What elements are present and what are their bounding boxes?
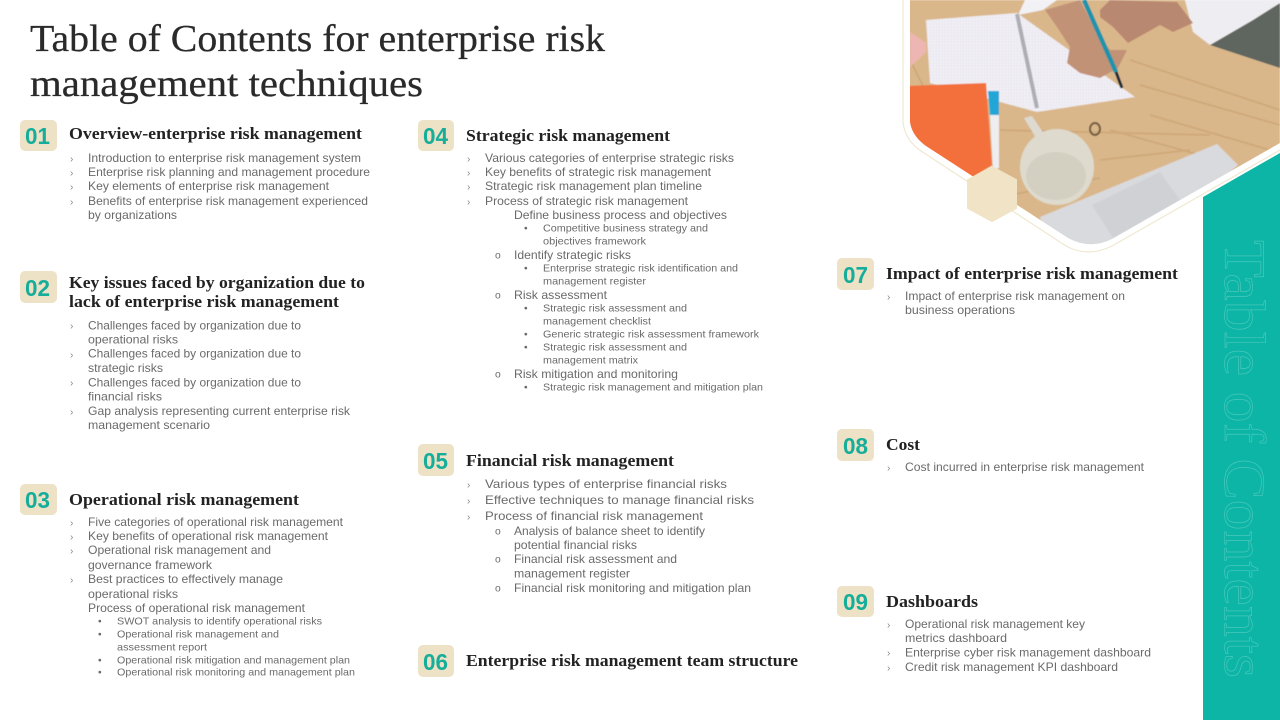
section 04: Identify strategic risks xyxy=(514,248,631,262)
section 05: › xyxy=(467,512,470,523)
section 04: Generic strategic risk assessment framework xyxy=(543,330,760,340)
section 03: Operational risk management xyxy=(69,490,299,509)
section 05: Financial risk assessment and xyxy=(514,552,677,566)
section 07: › xyxy=(887,292,890,303)
section 03: • xyxy=(98,668,102,678)
section 03: › xyxy=(70,532,73,543)
section 05: Financial risk management xyxy=(466,451,674,470)
section 01: 01 xyxy=(25,123,50,149)
section 07: Impact of enterprise risk management on xyxy=(905,289,1125,303)
section 02 xyxy=(20,271,365,432)
section 02: financial risks xyxy=(88,390,162,404)
section 04: Strategic risk management plan timeline xyxy=(485,179,702,193)
section 09: › xyxy=(887,648,890,659)
photo outline xyxy=(903,0,1280,252)
section 09: Credit risk management KPI dashboard xyxy=(905,660,1118,674)
section 01: Enterprise risk planning and management procedure xyxy=(88,165,370,179)
section 04: • xyxy=(524,264,528,274)
section 01: › xyxy=(70,197,73,208)
section 04: management matrix xyxy=(543,356,639,366)
section 02: strategic risks xyxy=(88,361,163,375)
section 01: Introduction to enterprise risk management system xyxy=(88,151,361,165)
section 04: management checklist xyxy=(543,316,651,328)
section 09: Operational risk management key xyxy=(905,617,1085,631)
section 01 xyxy=(20,120,370,222)
photo: desk with notebook, glass and laptop xyxy=(905,0,1280,262)
section 04: › xyxy=(467,168,470,179)
section 02: lack of enterprise risk management xyxy=(69,292,339,311)
section 06: Enterprise risk management team structure xyxy=(466,651,798,670)
section 02: › xyxy=(70,407,73,418)
section 04: management register xyxy=(543,276,647,288)
title: management techniques xyxy=(30,63,423,105)
section 04: Strategic risk management and mitigation plan xyxy=(543,382,763,394)
section 01: › xyxy=(70,168,73,179)
section 05: potential financial risks xyxy=(514,538,637,552)
section 09: Enterprise cyber risk management dashboard xyxy=(905,646,1151,660)
section 01: Benefits of enterprise risk management experienced xyxy=(88,194,368,208)
section 03: • xyxy=(98,656,102,666)
section 05: › xyxy=(467,480,470,491)
section 05: management register xyxy=(514,566,630,580)
section 02: › xyxy=(70,321,73,332)
section 03: › xyxy=(70,575,73,586)
section 04: 04 xyxy=(423,123,448,149)
section 02: operational risks xyxy=(88,332,178,346)
section 04: o xyxy=(495,290,501,302)
section 05: Financial risk monitoring and mitigation plan xyxy=(514,581,751,595)
section 09 xyxy=(837,586,1151,674)
section 03: Five categories of operational risk management xyxy=(88,515,344,529)
section 03: Key benefits of operational risk management xyxy=(88,529,329,543)
section 04: • xyxy=(524,342,528,354)
section 04: • xyxy=(524,382,528,394)
section 04: o xyxy=(495,370,501,380)
section 03: 03 xyxy=(25,487,50,513)
section 08: 08 xyxy=(843,433,868,459)
section 05: o xyxy=(495,554,501,566)
section 09: metrics dashboard xyxy=(905,631,1007,645)
section 04: Key benefits of strategic risk management xyxy=(485,165,712,179)
side band outlined text: Table of Contents xyxy=(1212,240,1277,678)
section 04: Various categories of enterprise strategic risks xyxy=(485,151,734,165)
section 05: › xyxy=(467,496,470,507)
section 02: › xyxy=(70,350,73,361)
section 03: Operational risk monitoring and management plan xyxy=(117,668,355,678)
section 02: Key issues faced by organization due to xyxy=(69,273,365,292)
section 03: › xyxy=(70,546,73,557)
section 03: Best practices to effectively manage xyxy=(88,572,283,586)
title: Table of Contents for enterprise risk xyxy=(30,18,605,60)
section 03 xyxy=(20,484,355,678)
section 08: Cost incurred in enterprise risk management xyxy=(905,460,1145,474)
section 04: • xyxy=(524,304,528,314)
section 03: › xyxy=(70,518,73,529)
section 02: Challenges faced by organization due to xyxy=(88,376,301,390)
section 06: 06 xyxy=(423,649,448,675)
section 07: Impact of enterprise risk management xyxy=(886,264,1178,283)
title xyxy=(30,18,605,105)
section 05: Effective techniques to manage financial risks xyxy=(485,493,754,507)
section 09: Dashboards xyxy=(886,592,978,611)
section 07: 07 xyxy=(843,262,868,288)
icon: cream hexagon xyxy=(968,167,1016,221)
section 03: • xyxy=(98,630,102,640)
section 09: › xyxy=(887,620,890,631)
section 05: o xyxy=(495,526,501,538)
section 05: Various types of enterprise financial risks xyxy=(485,477,727,491)
side band xyxy=(1203,153,1280,720)
section 04: o xyxy=(495,250,501,262)
section 08 xyxy=(837,429,1145,474)
section 07 xyxy=(837,258,1178,317)
section 04: Define business process and objectives xyxy=(514,208,727,222)
section 04: Enterprise strategic risk identification and xyxy=(543,264,738,274)
section 04: Risk assessment xyxy=(514,288,608,302)
section 04: objectives framework xyxy=(543,236,647,248)
section 05: Process of financial risk management xyxy=(485,509,704,523)
section 05: o xyxy=(495,584,501,594)
section 02: › xyxy=(70,378,73,389)
section 07: business operations xyxy=(905,303,1015,317)
section 05 xyxy=(418,444,754,595)
section 09: 09 xyxy=(843,589,868,615)
section 01: › xyxy=(70,154,73,165)
section 09: › xyxy=(887,663,890,674)
section 03: Operational risk management and xyxy=(88,543,271,557)
section 03: SWOT analysis to identify operational risks xyxy=(117,616,322,628)
section 03: • xyxy=(98,616,102,628)
section 04: › xyxy=(467,182,470,193)
section 04: Strategic risk management xyxy=(466,126,670,145)
section 03: assessment report xyxy=(117,642,207,654)
section 04 xyxy=(418,120,763,394)
section 04: Strategic risk assessment and xyxy=(543,342,687,354)
section 02: Gap analysis representing current enterprise risk xyxy=(88,404,351,418)
section 02: management scenario xyxy=(88,418,210,432)
section 03: operational risks xyxy=(88,587,178,601)
section 04: Process of strategic risk management xyxy=(485,194,689,208)
section 02: Challenges faced by organization due to xyxy=(88,318,301,332)
section 03: Operational risk management and xyxy=(117,630,279,640)
section 03: Operational risk mitigation and management plan xyxy=(117,656,350,666)
section 01: › xyxy=(70,182,73,193)
section 01: Key elements of enterprise risk management xyxy=(88,179,330,193)
section 06 xyxy=(418,645,798,677)
section 04: • xyxy=(524,330,528,340)
section 01: by organizations xyxy=(88,208,177,222)
section 04: • xyxy=(524,224,528,234)
section 05: Analysis of balance sheet to identify xyxy=(514,524,705,538)
section 04: › xyxy=(467,197,470,208)
section 04: › xyxy=(467,154,470,165)
section 02: Challenges faced by organization due to xyxy=(88,346,301,360)
section 01: Overview-enterprise risk management xyxy=(69,124,362,143)
section 08: Cost xyxy=(886,435,920,454)
section 02: 02 xyxy=(25,275,50,301)
section 03: Process of operational risk management xyxy=(88,601,306,615)
section 05: 05 xyxy=(423,448,448,474)
section 04: Strategic risk assessment and xyxy=(543,304,687,314)
section 04: Competitive business strategy and xyxy=(543,224,708,234)
section 08: › xyxy=(887,463,890,474)
section 04: Risk mitigation and monitoring xyxy=(514,367,678,381)
section 03: governance framework xyxy=(88,558,213,572)
